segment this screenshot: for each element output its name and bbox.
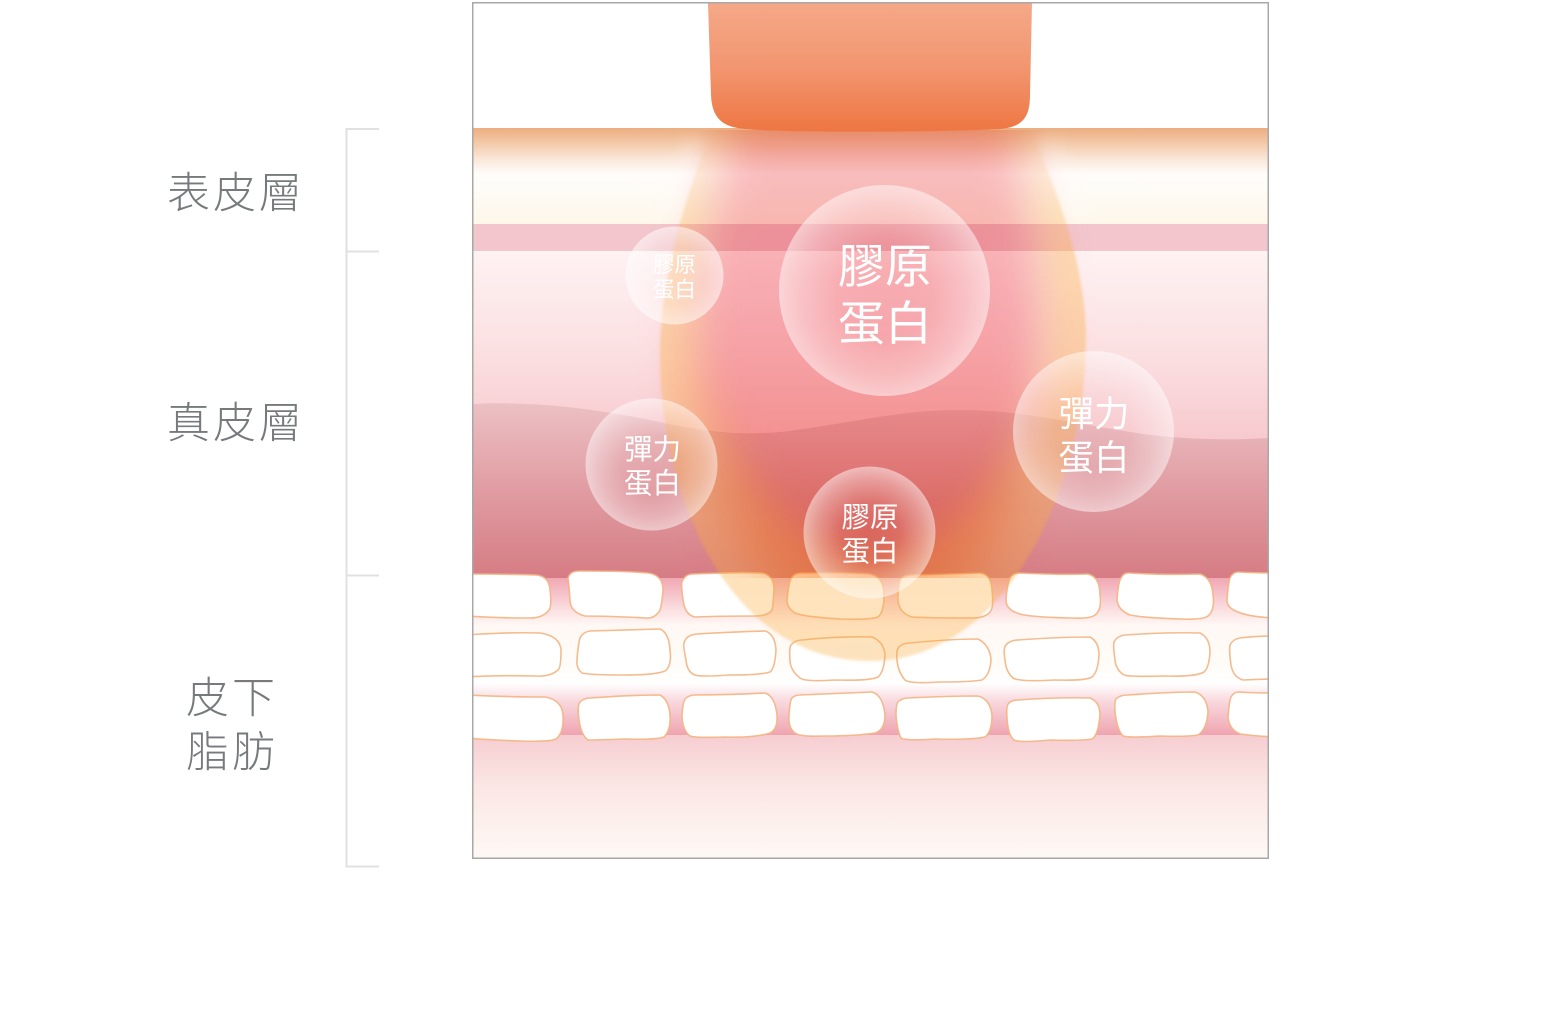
bubble: elastin left: 彈力 <box>624 434 681 466</box>
bubble: collagen small: 蛋白 <box>653 278 696 302</box>
label: dermis: 真皮層 <box>167 400 305 448</box>
bubble: collagen small <box>626 226 724 324</box>
panel: skin cross-section <box>465 110 1275 858</box>
epidermis boundary band <box>473 224 1268 251</box>
dermis lower layer with wave <box>473 403 1268 578</box>
skin layer infographic <box>169 2 1269 868</box>
bubble: elastin left: 蛋白 <box>624 468 681 500</box>
fat cells <box>465 571 1275 742</box>
label: epidermis: 表皮層 <box>167 170 305 218</box>
white halo beside heat zone in epidermis <box>682 138 1060 158</box>
bubble: elastin right: 彈力 <box>1058 394 1130 434</box>
dermis upper layer <box>473 251 1268 441</box>
heat zone: orange rim shape <box>660 130 1086 661</box>
row 1 <box>465 574 551 618</box>
bubble: collagen bottom: 膠原 <box>841 502 899 534</box>
bubble: collagen small: 膠原 <box>653 253 696 277</box>
row 3 <box>465 695 563 741</box>
label: subcutaneous fat <box>186 675 278 777</box>
lower fat layer <box>473 735 1268 858</box>
label: subcutaneous fat: 皮下 <box>186 675 278 723</box>
bubble: collagen large: 蛋白 <box>838 297 932 350</box>
heat zone: inner pink-red glow <box>689 110 1043 620</box>
row 2 <box>465 633 561 677</box>
probe head <box>708 3 1032 132</box>
bubble: elastin left <box>586 398 718 530</box>
bubble: elastin right <box>1013 351 1174 512</box>
fat layer background <box>473 578 1268 735</box>
bubble: collagen bottom <box>804 466 936 598</box>
label: subcutaneous fat: 脂肪 <box>186 729 278 777</box>
bubble: collagen large: 膠原 <box>838 240 932 293</box>
layer brackets <box>346 129 379 866</box>
panel frame <box>473 3 1268 858</box>
bubble: elastin right: 蛋白 <box>1058 438 1130 478</box>
epidermis layer <box>473 128 1268 224</box>
bubble: collagen bottom: 蛋白 <box>841 536 899 568</box>
bubble: collagen large <box>779 185 990 396</box>
